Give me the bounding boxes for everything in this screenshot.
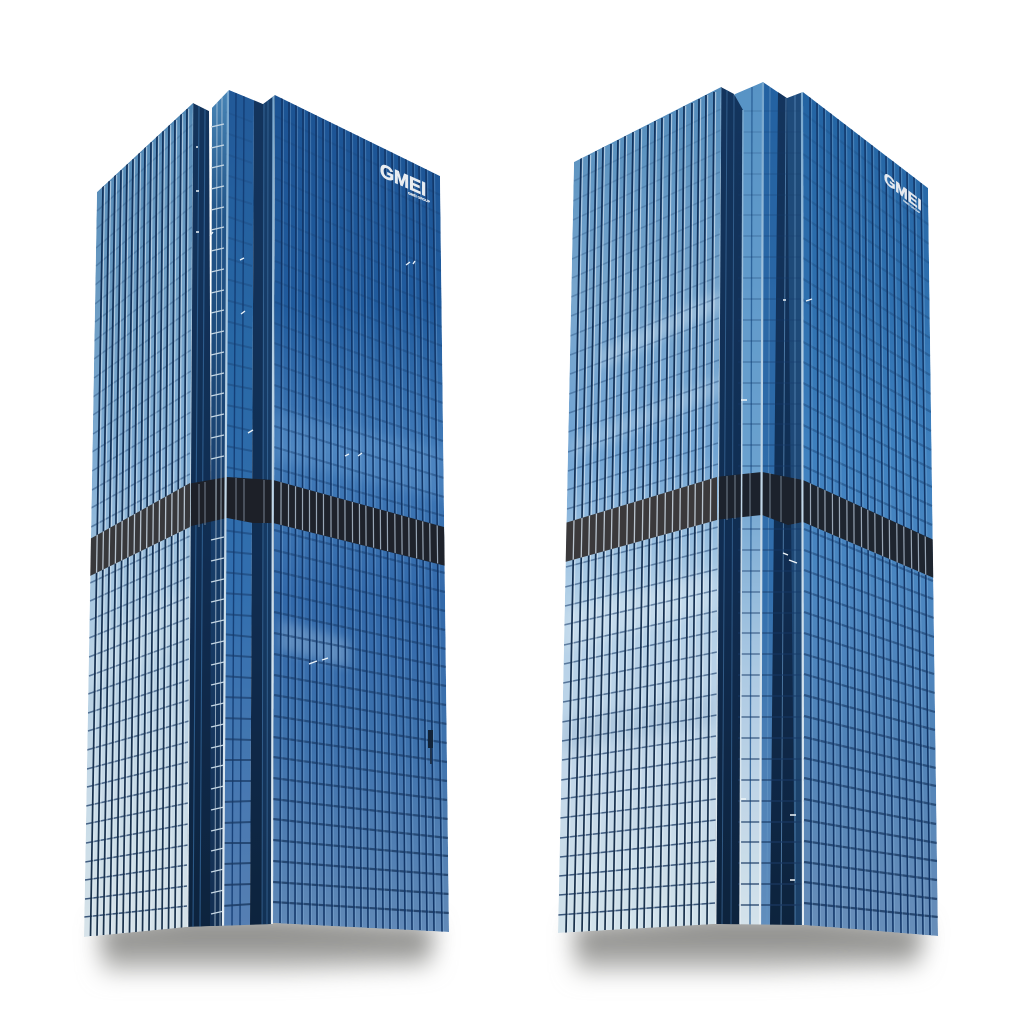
- glass glints and dark panel: [309, 261, 415, 664]
- white corner fins: [760, 82, 803, 925]
- horizontal dark band: centre: [187, 477, 273, 527]
- glass glints: centre of left tower: [196, 147, 253, 433]
- recess: second dark channel: [770, 92, 802, 925]
- centre blue face: [760, 82, 785, 925]
- right facade: left tower: [273, 95, 449, 932]
- white corner fins: [223, 91, 274, 926]
- horizontal dark band: right facade: [803, 480, 934, 578]
- sign: GMEI logo left tower: GMEI GROUP: [408, 191, 431, 204]
- building: right tower: [558, 82, 938, 936]
- sign: GMEI logo left tower: GMEI: [380, 159, 426, 201]
- sign: GMEI logo right tower: GMEI GROUP: [903, 198, 920, 215]
- left facade: right tower: [558, 87, 721, 933]
- horizontal dark band: centre: [715, 472, 803, 525]
- rail strip: [787, 92, 802, 925]
- ground shadow: left tower: [100, 915, 434, 972]
- horizontal dark band: left facade: [565, 477, 717, 562]
- building: left tower: [84, 90, 449, 937]
- recess: first dark channel: [715, 87, 743, 925]
- ground shadow: right tower: [574, 915, 924, 972]
- light centre strip: [735, 82, 763, 925]
- centre recess and fins: left tower: [187, 90, 275, 927]
- glass glints: [741, 300, 797, 880]
- left facade: left tower: [84, 103, 193, 937]
- centre blue face: [224, 90, 254, 926]
- ladder strip: [210, 90, 229, 926]
- ladder rails and rungs: [211, 96, 224, 926]
- sign: GMEI logo right tower: GMEI: [884, 169, 922, 215]
- horizontal dark band: left facade: [88, 483, 190, 577]
- recess: second dark channel: [250, 95, 275, 926]
- recess: first dark channel: [187, 103, 213, 927]
- floor lines: centre: [738, 111, 808, 905]
- centre recess and fins: right tower: [715, 82, 808, 925]
- right facade: right tower: [803, 92, 938, 936]
- horizontal dark band: right facade: [273, 480, 446, 566]
